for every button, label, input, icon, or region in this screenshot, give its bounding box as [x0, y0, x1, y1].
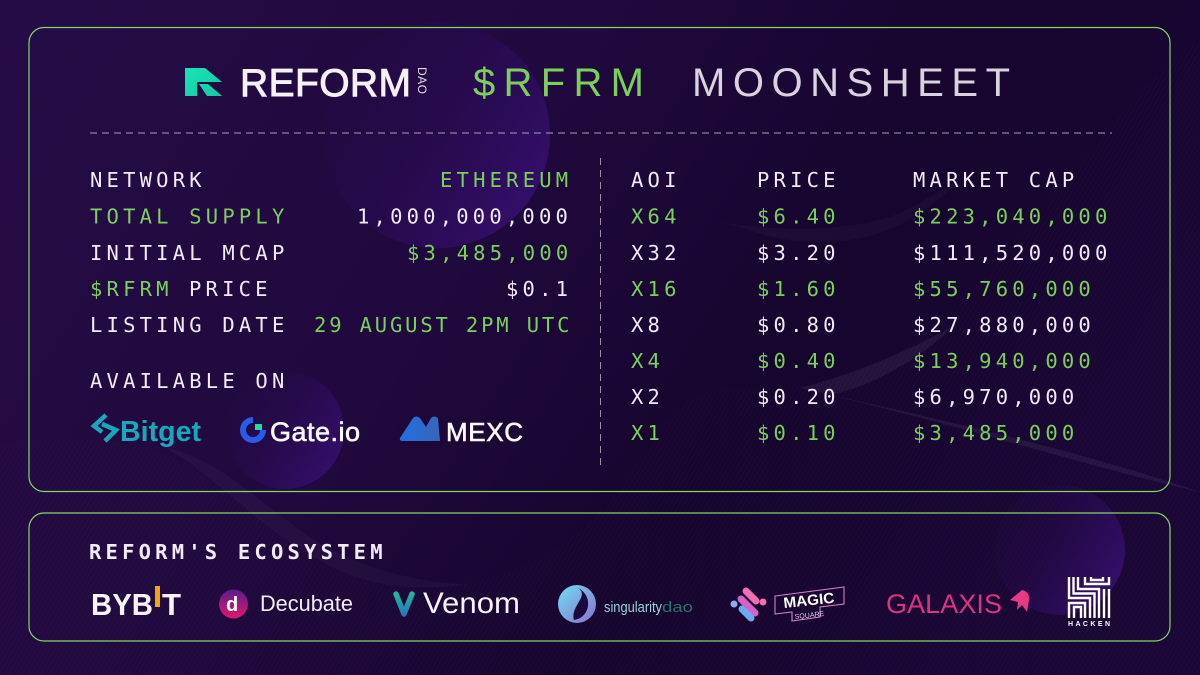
logo: singularitydao: [558, 585, 693, 623]
ecosystem heading: REFORM'S ECOSYSTEM: [89, 540, 387, 564]
aoi table: PRICE: [757, 168, 840, 192]
token details list: 29 AUGUST 2PM UTC: [314, 313, 572, 337]
token details list: $RFRM: [90, 277, 173, 301]
aoi table: X64: [631, 204, 681, 228]
aoi table: $13,940,000: [913, 349, 1095, 373]
logo: magic square: [730, 587, 844, 621]
logo: mexc: MEXC: [446, 417, 523, 447]
token details list: 1,000,000,000: [357, 204, 572, 228]
aoi table: X16: [631, 277, 681, 301]
aoi table: $27,880,000: [913, 313, 1095, 337]
aoi table: $0.20: [757, 385, 840, 409]
aoi table: X2: [631, 385, 664, 409]
logo: venom: Venom: [423, 587, 520, 620]
token details list: INITIAL MCAP: [90, 241, 289, 265]
aoi table: $223,040,000: [913, 204, 1112, 228]
token details list: [90, 168, 572, 337]
aoi table: $111,520,000: [913, 241, 1112, 265]
token details list: NETWORK: [90, 168, 206, 192]
moonsheet heading: MOONSHEET: [692, 61, 1010, 105]
dao label: DAO: [415, 67, 429, 94]
available on heading: AVAILABLE ON: [90, 369, 289, 393]
aoi table: $3,485,000: [913, 421, 1078, 445]
token details list: $3,485,000: [407, 241, 572, 265]
title row: [185, 61, 1010, 105]
token details list: TOTAL SUPPLY: [90, 204, 289, 228]
aoi table: [631, 168, 1112, 445]
logo: galaxis: GALAXIS: [886, 589, 1002, 619]
icon: reform logo: [185, 68, 222, 96]
token name: $RFRM: [473, 61, 644, 105]
logo: bybit: T: [162, 587, 181, 622]
aoi table: $6,970,000: [913, 385, 1078, 409]
exchange logos: [94, 415, 523, 448]
logo: decubate: Decubate: [260, 591, 353, 616]
logo: singularitydao: dao: [662, 600, 693, 616]
aoi table: $0.80: [757, 313, 840, 337]
aoi table: $55,760,000: [913, 277, 1095, 301]
logo: magic square: MAGIC: [783, 590, 835, 612]
aoi table: X4: [631, 349, 664, 373]
aoi table: MARKET CAP: [913, 168, 1078, 192]
aoi table: AOI: [631, 168, 681, 192]
logo: gate.io: Gate.io: [270, 417, 360, 447]
aoi table: $1.60: [757, 277, 840, 301]
background blob: top: [324, 22, 550, 248]
logo: decubate: d: [226, 594, 238, 616]
logo: singularitydao: singularity: [604, 600, 663, 616]
token details list: ETHEREUM: [440, 168, 572, 192]
aoi table: $0.40: [757, 349, 840, 373]
aoi table: X32: [631, 241, 681, 265]
aoi table: $6.40: [757, 204, 840, 228]
background waves: [160, 180, 1200, 587]
background blob: lower right: [995, 485, 1125, 615]
aoi table: X1: [631, 421, 664, 445]
aoi table: $3.20: [757, 241, 840, 265]
aoi table: $0.10: [757, 421, 840, 445]
aoi table: X8: [631, 313, 664, 337]
reform wordmark: REFORM: [240, 62, 411, 105]
logo: decubate: [219, 590, 353, 618]
token details list: LISTING DATE: [90, 313, 289, 337]
token details list: $0.1: [506, 277, 572, 301]
logo: bybit: BYB: [91, 587, 153, 622]
token details list: PRICE: [189, 277, 272, 301]
ecosystem logos: [91, 577, 1110, 628]
logo: magic square: SQUARE: [794, 611, 825, 621]
panel: token details: [29, 28, 1170, 492]
panel: ecosystem: [29, 513, 1170, 641]
logo: hacken: [1068, 577, 1110, 628]
background blob: lower left: [226, 371, 344, 489]
logo: hacken: HACKEN: [1068, 621, 1110, 628]
logo: bitget: Bitget: [120, 416, 201, 448]
logo: mexc: [400, 416, 523, 447]
